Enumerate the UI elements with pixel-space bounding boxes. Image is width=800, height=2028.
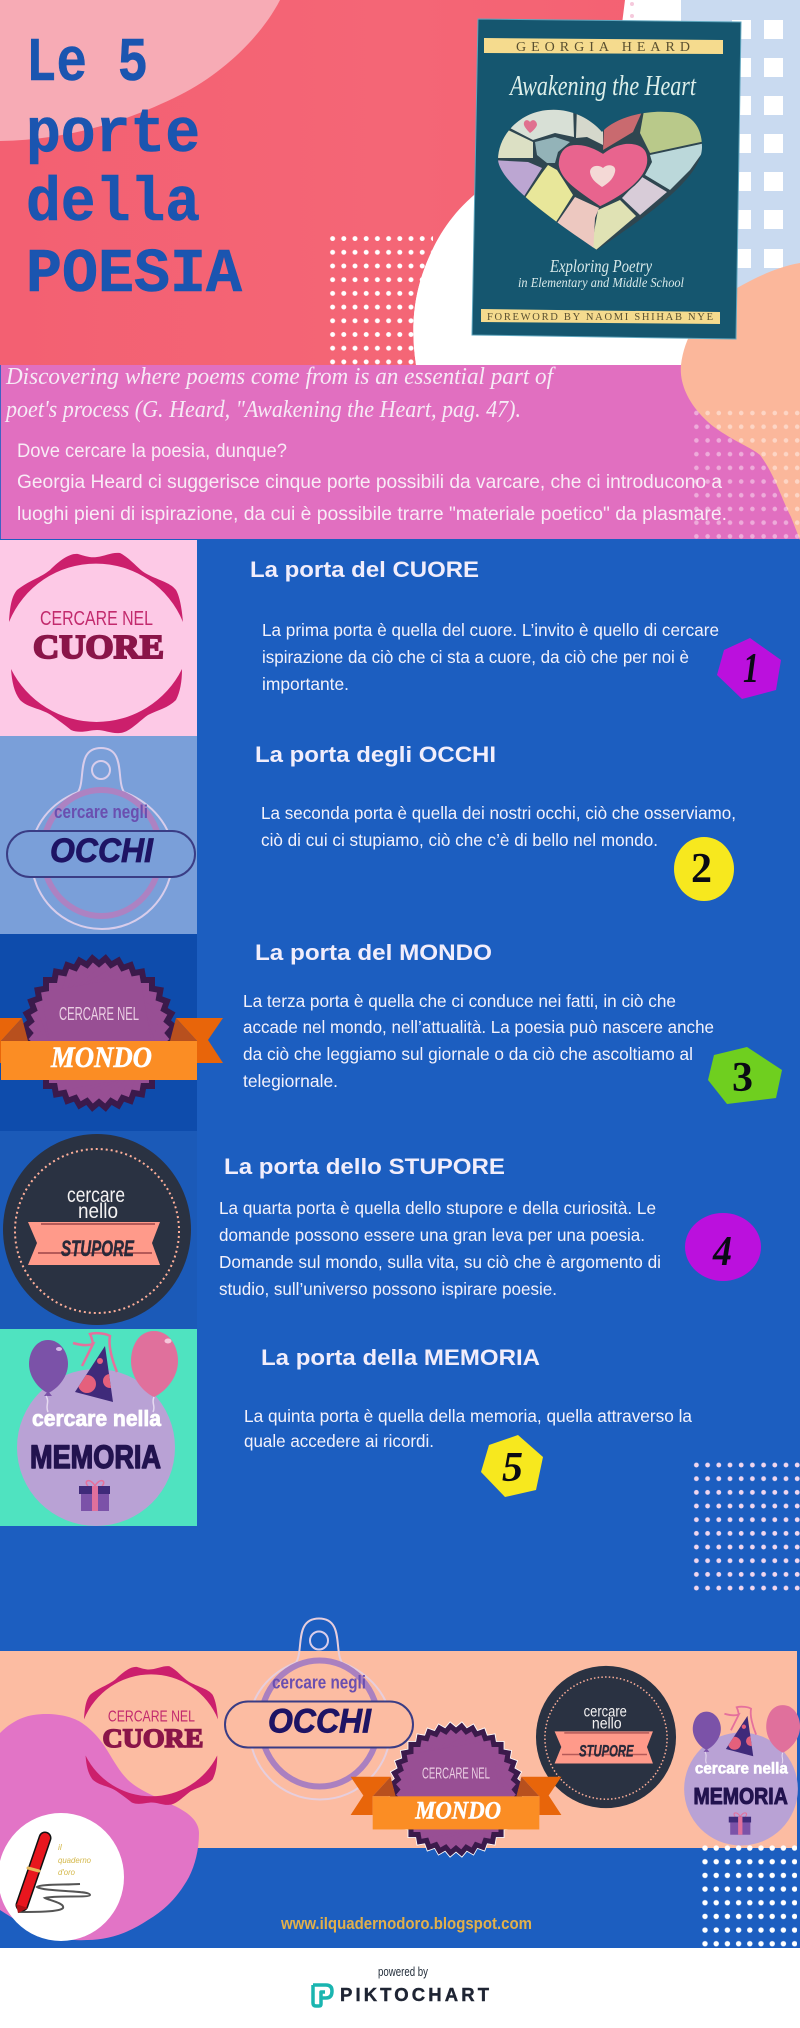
number 2: 2 [691,846,712,892]
summary badge: occhi: cercare negli [272,1672,366,1692]
number 1: 1 [743,646,759,692]
book subtitle: in Elementary and Middle School [518,276,684,291]
panel: memoria badge [0,1329,197,1526]
title [26,28,243,310]
body text: La quinta porta è quella della memoria, quella attraverso la [244,1406,692,1426]
number 3 [708,1047,782,1104]
logo text: il [58,1842,63,1852]
gift [79,1481,110,1511]
body text: importante. [262,674,349,694]
summary badge: mondo [351,1722,561,1857]
book cover [472,19,741,339]
badge word: OCCHI [50,832,154,870]
body text: La seconda porta è quella dei nostri occhi, ciò che osserviamo, [261,803,736,823]
body text: Domande sul mondo, sulla vita, su ciò che è argomento di [219,1252,661,1272]
badge label: cercare nella [32,1406,162,1431]
summary badge: stupore [536,1666,676,1808]
heading: La porta della MEMORIA [261,1345,540,1370]
summary badge: cuore [84,1666,218,1805]
body text: accade nel mondo, nell’attualità. La poesia può nascere anche [243,1017,714,1037]
body text: ispirazione da ciò che ci sta a cuore, da ciò che per noi è [262,647,689,667]
badge label: CERCARE NEL [40,608,153,630]
book heart artwork [498,110,702,250]
logo: il quaderno d'oro [0,1813,124,1941]
quote: Discovering where poems come from is an essential part of [5,364,556,390]
badge label [67,1184,125,1223]
ribbon [28,1222,160,1265]
body text: da ciò che leggiamo sul giornale o da ciò che ascoltiamo al [243,1044,693,1064]
blob: peach [681,263,800,540]
tag outline [31,748,173,929]
number 4: 4 [712,1229,732,1275]
summary badge: cuore: CUORE [102,1724,203,1753]
badge label: cercare [67,1184,125,1207]
balloons [29,1331,178,1412]
logo text: quaderno [58,1855,91,1865]
pill [7,831,195,877]
summary badge: cuore: CERCARE NEL [108,1709,195,1726]
section: occhi [255,742,736,901]
title: porte [26,99,200,170]
summary badge: stupore: STUPORE [579,1743,634,1761]
heading: La porta del MONDO [255,940,492,965]
badge word: MEMORIA [30,1439,161,1475]
summary badge: mondo: MONDO [414,1795,501,1824]
ribbon band [1,1018,197,1080]
book top bar: GEORGIA HEARD [516,40,690,55]
body text: telegiornale. [243,1071,338,1091]
body text [244,1406,692,1451]
website link: www.ilquadernodoro.blogspot.com [280,1914,532,1933]
heading: La porta degli OCCHI [255,742,496,767]
summary badge: memoria: cercare nella [695,1761,788,1778]
number 4 [685,1213,761,1281]
book title: Awakening the Heart [508,71,697,102]
heading: La porta dello STUPORE [224,1154,505,1179]
panel: cuore badge [0,540,197,736]
body text [262,620,719,694]
panel: occhi badge [0,736,197,934]
logo text: d'oro [58,1867,75,1877]
title: Le 5 [26,28,148,99]
title: della [26,168,200,239]
summary badge: occhi [225,1618,413,1800]
dark circle [3,1134,191,1325]
section: mondo [243,940,782,1104]
body text: domande possono essere una gran leva per una poesia. [219,1225,645,1245]
heading: La porta del CUORE [250,557,479,582]
section: memoria [244,1345,692,1497]
body text: La quarta porta è quella dello stupore e della curiosità. Le [219,1198,656,1218]
body text: quale accedere ai ricordi. [244,1431,434,1451]
book foreword bar [481,309,720,324]
intro text: Dove cercare la poesia, dunque? [17,441,287,462]
number 3: 3 [732,1055,753,1101]
badge word: MONDO [50,1041,152,1074]
book top bar [484,38,723,55]
number 1 [717,638,781,699]
badge label: CERCARE NEL [59,1004,139,1024]
lavender circle [17,1369,175,1526]
number 5: 5 [502,1445,523,1491]
party hat [73,1333,117,1402]
dotted ring [15,1149,179,1313]
ribbon tails [0,1018,223,1063]
summary badge: occhi: OCCHI [268,1702,372,1740]
badge label: cercare negli [54,802,148,822]
logo text [58,1842,91,1877]
section: stupore [219,1154,761,1299]
panel: summary band [0,1651,797,1848]
panel: intro [0,365,800,539]
intro text: luoghi pieni di ispirazione, da cui è possibile trarre "materiale poetico" da plasmare. [17,504,727,525]
blob: pink corner [0,1714,199,1940]
panel: mondo badge [0,934,223,1131]
starburst [20,954,178,1112]
body text [243,991,714,1091]
panel: stupore badge [0,1131,197,1329]
summary badge: stupore: nello [592,1715,622,1732]
badge label: nello [78,1200,118,1223]
intro text: Georgia Heard ci suggerisce cinque porte possibili da varcare, che ci introducono a [17,472,722,493]
summary badge: memoria [684,1705,800,1846]
section: cuore [250,557,781,699]
title: POESIA [26,239,243,310]
body text [261,803,736,850]
body text [219,1198,661,1299]
panel: header [0,0,800,365]
book subtitle: Exploring Poetry [549,256,652,276]
badge arcs [9,553,183,733]
icon: red pen [16,1838,45,1913]
footer: powered by [0,1948,800,2028]
intro text [17,441,727,525]
badge word: STUPORE [61,1236,135,1261]
summary badge: stupore: cercare [584,1704,627,1721]
body text: ciò di cui ci stupiamo, ciò che c’è di bello nel mondo. [261,830,658,850]
powered by text: powered by [378,1965,429,1979]
piktochart wordmark: PIKTOCHART [340,1984,490,2005]
number 2 [674,837,734,901]
icon: piktochart [313,1985,332,2006]
body text: studio, sull’universo possono ispirare poesie. [219,1279,557,1299]
squiggle [18,1884,90,1912]
body text: La prima porta è quella del cuore. L’invito è quello di cercare [262,620,719,640]
number 5 [481,1435,543,1497]
body text: La terza porta è quella che ci conduce nei fatti, in ciò che [243,991,676,1011]
book subtitle [518,256,684,291]
summary badge: mondo: CERCARE NEL [422,1765,490,1782]
quote [4,364,556,423]
quote: poet's process (G. Heard, "Awakening the Heart, pag. 47). [4,397,521,423]
book foreword bar: FOREWORD BY NAOMI SHIHAB NYE [487,312,713,323]
badge word: CUORE [33,629,164,666]
